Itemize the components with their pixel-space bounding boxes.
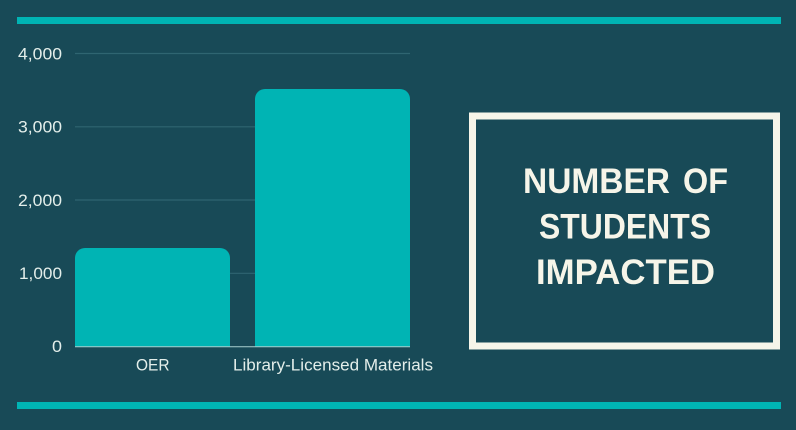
title text: OF [683,162,728,201]
y axis labels: 4,000 [18,46,62,64]
title text: NUMBER [523,162,670,201]
y axis labels: 2,000 [18,192,62,210]
bar chart [18,46,433,374]
y axis labels: 3,000 [18,118,62,136]
x axis labels [136,356,433,374]
bar: OER [75,248,230,346]
title text [523,162,728,292]
x axis labels: Library-Licensed Materials [233,356,433,374]
x axis line [75,346,410,348]
title text: STUDENTS [539,208,711,246]
bottom teal bar [17,402,781,409]
y axis labels: 1,000 [19,265,62,283]
y axis labels [18,46,62,356]
x axis labels: OER [136,356,170,374]
top teal bar [17,17,781,24]
y axis labels: 0 [52,338,62,356]
bar: Library-Licensed Materials [255,89,410,346]
title frame [472,116,776,346]
title text: IMPACTED [536,253,715,292]
